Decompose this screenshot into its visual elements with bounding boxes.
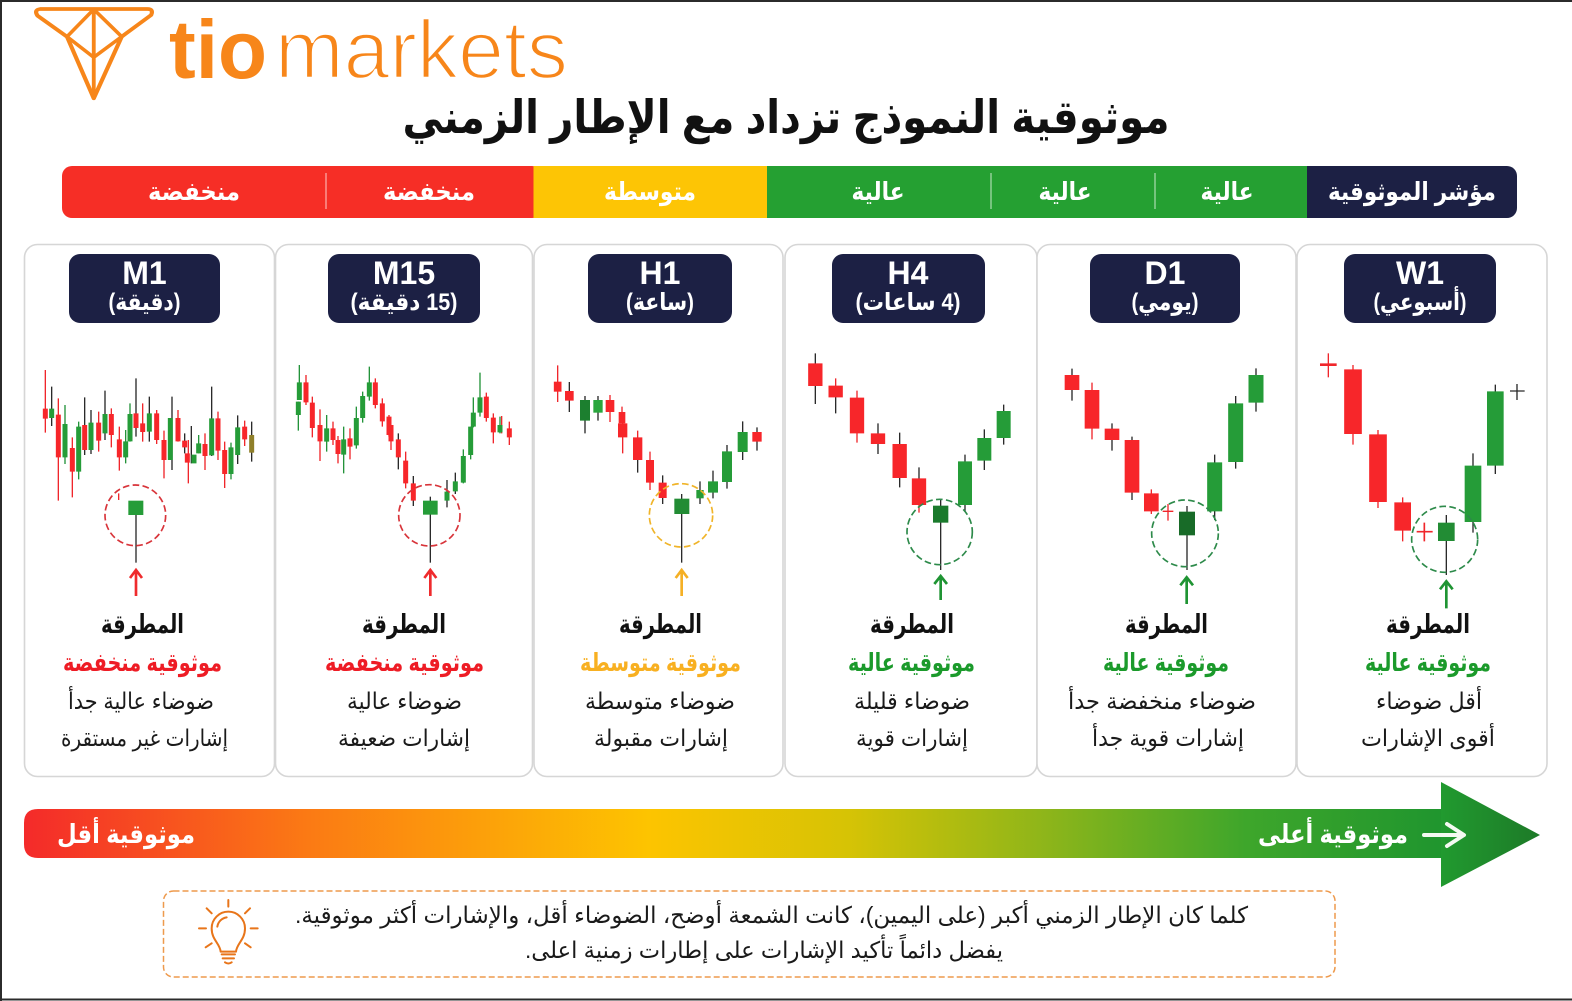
panel text D1 [1068,609,1256,752]
panel text M15: ضوضاء عالية [347,688,462,715]
dashed highlight circle [399,485,460,546]
panel text H1: موثوقية متوسطة [580,649,741,678]
arrow up [1440,581,1453,608]
callout: tip [164,891,1335,977]
hammer candle [1438,515,1455,575]
dashed highlight circle [105,485,166,546]
panel text M15: إشارات ضعيفة [338,725,470,752]
callout line 2: يفضل دائماً تأكيد الإشارات على إطارات زمنية اعلى. [525,934,1003,964]
timeframe badge H4: H4 [888,255,929,291]
panel: M1 [24,244,274,776]
timeframe badge H4: (4 ساعات) [856,289,960,316]
bar segments [62,166,1517,218]
panel text D1: المطرقة [1125,609,1208,640]
logo wordmark: tio [169,3,267,96]
arrow head [1441,782,1540,887]
dashed highlight circle [907,499,972,565]
panel text H1: إشارات مقبولة [594,725,728,752]
bar label: high 3: عالية [1200,178,1254,206]
bar label: indicator: مؤشر الموثوقية [1328,178,1496,207]
hammer candle [1179,506,1195,570]
panel text D1: ضوضاء منخفضة جدأ [1068,686,1256,715]
panel text H4 [848,609,975,752]
panel: H4 [785,244,1037,776]
panel text M1: إشارات غير مستقرة [61,725,228,752]
panel: M15 [276,244,532,776]
candlestick chart H1 [558,365,757,596]
panel text D1: إشارات قوية جدأ [1092,723,1244,752]
timeframe badge H4 [832,254,985,323]
hammer candle [674,494,689,563]
panel box [24,244,274,776]
hammer candle [933,499,948,570]
panel box [1297,244,1547,776]
panel text M15: المطرقة [362,609,446,640]
arrow up [934,576,947,600]
panel box [534,244,783,776]
panel text W1: موثوقية عالية [1365,649,1491,678]
timeframe badge M15 [328,254,480,323]
bar label: high 2: عالية [1038,178,1092,206]
callout line 1: كلما كان الإطار الزمني أكبر (على اليمين)، كانت الشمعة أوضح، الضوضاء أقل، والإشارات أكثر موثوقية. [295,900,1248,929]
arrow up [676,570,688,596]
panel box [276,244,532,776]
bar label: low 2: منخفضة [383,178,475,206]
candlestick chart M1 [45,370,252,596]
candlestick chart D1 [1072,368,1256,604]
timeframe badge H1: H1 [640,255,680,291]
bar label: low 1: منخفضة [148,178,240,206]
timeframe badge M15: (15 دقيقة) [350,289,457,316]
panel text H1: المطرقة [619,609,702,640]
panel text M1: موثوقية منخفضة [63,649,222,678]
icon: white arrow [1424,824,1464,846]
panel text H1 [580,609,741,752]
timeframe badge M1: M1 [122,255,167,291]
bar label: medium: متوسطة [604,178,696,207]
timeframe badge W1: W1 [1396,255,1444,291]
panel box [1037,244,1296,776]
panel text W1: أقوى الإشارات [1361,723,1495,752]
timeframe badge D1 [1090,254,1240,323]
panel text M1 [61,609,228,752]
panel text M1: المطرقة [101,609,184,640]
timeframe badge D1: D1 [1145,255,1185,291]
panel text M1: ضوضاء عالية جدأ [68,686,214,715]
candlestick chart W1 [1320,353,1525,608]
dashed highlight circle [1152,500,1218,567]
panel text H4: موثوقية عالية [848,649,975,678]
title: موثوقية النموذج تزداد مع الإطار الزمني [402,91,1170,144]
hammer candle [423,497,438,563]
doji crosses [1320,353,1525,541]
timeframe badge D1: (يومي) [1132,289,1198,316]
panel text H4: إشارات قوية [856,725,968,752]
timeframe badge W1: (أسبوعي) [1374,286,1466,316]
label: higher reliability: موثوقية أعلى [1258,817,1408,850]
arrow up [1180,577,1193,604]
reliability indicator bar [62,166,1517,218]
logo wordmark: markets [275,3,568,96]
timeframe badge H1 [588,254,732,323]
candlestick chart M15 [298,365,509,596]
panel text H4: ضوضاء قليلة [854,688,970,715]
logo: tiomarkets [36,3,568,98]
panel: H1 [534,244,783,776]
panel text W1 [1361,609,1495,752]
dashed highlight circle [1412,506,1478,572]
bar label: high 1: عالية [852,178,904,206]
timeframe badge M15: M15 [373,255,435,291]
icon: light bulb [199,900,258,963]
timeframe badge M1 [69,254,220,323]
hammer candle [128,501,143,563]
panel text M15 [325,609,484,752]
callout box [164,891,1335,977]
panel text H1: ضوضاء متوسطة [585,688,735,715]
panel: W1 [1297,244,1547,776]
icon: logo emblem [36,9,152,98]
reliability gradient arrow [24,782,1540,887]
panel text H4: المطرقة [870,609,954,640]
panel text D1: موثوقية عالية [1103,649,1229,678]
panel box [785,244,1037,776]
label: lower reliability: موثوقية أقل [57,817,195,850]
panel: D1 [1037,244,1296,776]
panel text W1: أقل ضوضاء [1376,686,1482,715]
panel text W1: المطرقة [1386,609,1470,640]
candlestick chart H4 [815,353,1004,600]
timeframe badge M1: (دقيقة) [108,289,180,316]
arrow shaft [24,809,1445,858]
arrow up [424,570,436,596]
panel text M15: موثوقية منخفضة [325,649,484,678]
timeframe badge H1: (ساعة) [626,289,694,316]
arrow up [130,570,142,596]
dashed highlight circle [649,484,713,547]
timeframe badge W1 [1344,254,1496,323]
doji cross [1163,504,1173,521]
